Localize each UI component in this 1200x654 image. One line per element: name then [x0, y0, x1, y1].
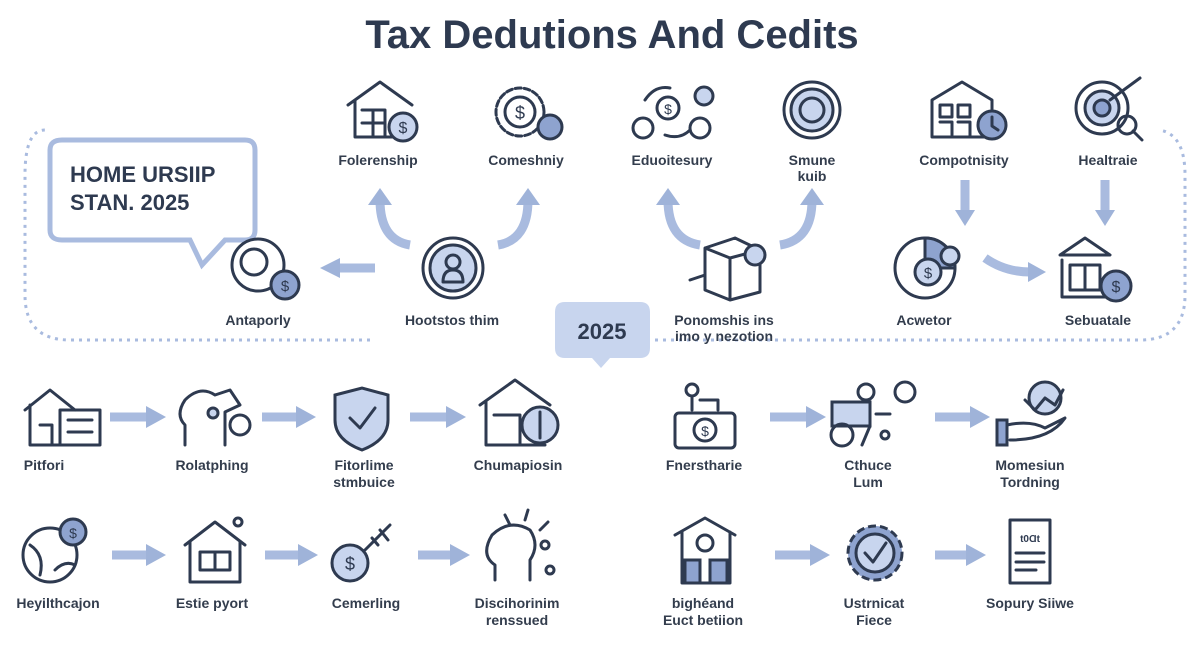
speech bubble	[50, 140, 255, 265]
icon: bank	[1060, 238, 1131, 328]
icon: globe	[16, 519, 100, 611]
icon: target magnify (Healtraie): Healtraie	[1078, 152, 1138, 168]
icon: head: Discihorinim	[475, 595, 559, 611]
icon: Antaporly	[225, 239, 299, 328]
icon: exchange (Eduoitesury)	[632, 87, 713, 168]
icon: hand: Tordning	[1000, 474, 1060, 490]
title: Tax Dedutions And Cedits	[365, 13, 859, 57]
arrows top	[320, 180, 1115, 282]
icon: person circle: Hootstos thim	[405, 312, 499, 328]
icon: key coin	[332, 525, 400, 611]
icon: house top (Folerenship): Folerenship	[338, 152, 418, 168]
icon: house small	[176, 518, 249, 611]
icon: building clock (Compotnisity): Compotnisity	[919, 152, 1009, 168]
icon: house top (Folerenship): $	[399, 120, 408, 137]
icon: target magnify (Healtraie)	[1076, 78, 1142, 168]
icon: hand	[995, 382, 1065, 490]
arrows row2	[110, 412, 148, 422]
icon: shield	[333, 388, 395, 490]
icon: gear check: Ustrnicat	[844, 595, 905, 611]
icon: target coin (Smune kuib): Smune	[789, 152, 836, 168]
icon: box: Ponomshis ins	[674, 312, 774, 328]
icon: Pitfori: Pitfori	[24, 457, 64, 473]
icon: gear (Comeshniy): Comeshniy	[488, 152, 564, 168]
icon: globe: Heyilthcajon	[16, 595, 100, 611]
icon: document: t0Ɑt	[1020, 534, 1041, 545]
icon: target coin (Smune kuib)	[784, 82, 840, 184]
icon: Antaporly: Antaporly	[225, 312, 291, 328]
icon: shield: Fitorlime	[334, 457, 394, 473]
icon: house coin: bighéand	[672, 595, 734, 611]
icon: box	[674, 238, 774, 344]
icon: money: $	[701, 423, 709, 439]
icon: house top (Folerenship)	[338, 82, 418, 168]
icon: document	[986, 520, 1074, 611]
icon: garage: Chumapiosin	[474, 457, 562, 473]
icon: pie: $	[924, 265, 933, 282]
icon: person circle	[405, 238, 499, 328]
arrows row3	[112, 550, 148, 560]
icon: house small: Estie pyort	[176, 595, 249, 611]
icon: pie: Acwetor	[896, 312, 952, 328]
icon: network	[831, 382, 915, 490]
icon: key coin: Cemerling	[332, 595, 400, 611]
icon: money: Fnerstharie	[666, 457, 742, 473]
icon: gear check	[844, 526, 905, 628]
icon: house coin: Euct betiion	[663, 612, 743, 628]
icon: target coin (Smune kuib): kuib	[798, 168, 826, 184]
icon: gear (Comeshniy): $	[515, 103, 525, 123]
icon: building clock (Compotnisity)	[919, 82, 1009, 168]
icon: gear check: Fiece	[856, 612, 892, 628]
icon: network: Lum	[853, 474, 883, 490]
icon: head: renssued	[486, 612, 548, 628]
icon: Antaporly: $	[281, 278, 290, 295]
speech bubble: HOME URSIIP	[70, 162, 215, 187]
icon: bank: Sebuatale	[1065, 312, 1131, 328]
icon: box: imo y nezotion	[675, 328, 773, 344]
icon: network: Cthuce	[844, 457, 892, 473]
icon: garage	[474, 380, 562, 473]
icon: hand: Momesiun	[995, 457, 1065, 473]
icon: money	[666, 384, 742, 473]
icon: gear (Comeshniy)	[488, 88, 564, 168]
speech bubble: STAN. 2025	[70, 190, 189, 215]
badge 2025: 2025	[578, 319, 626, 344]
icon: Pitfori	[24, 390, 100, 473]
icon: exchange (Eduoitesury): Eduoitesury	[632, 152, 713, 168]
icon: pie	[895, 238, 959, 328]
icon: head	[475, 510, 559, 628]
icon: globe: $	[69, 525, 77, 541]
badge 2025	[555, 302, 650, 368]
icon: house coin	[663, 518, 743, 628]
row 3	[16, 510, 1074, 628]
icon: bank: $	[1112, 279, 1121, 296]
dotted frame	[25, 130, 1185, 340]
icon: Rolatphing: Rolatphing	[175, 457, 249, 473]
icon: key coin: $	[345, 554, 355, 574]
row 2	[24, 380, 1065, 490]
icon: document: Sopury Siiwe	[986, 595, 1074, 611]
icon: shield: stmbuice	[333, 474, 395, 490]
icon: exchange (Eduoitesury): $	[664, 101, 672, 117]
icon: Rolatphing	[175, 390, 250, 473]
